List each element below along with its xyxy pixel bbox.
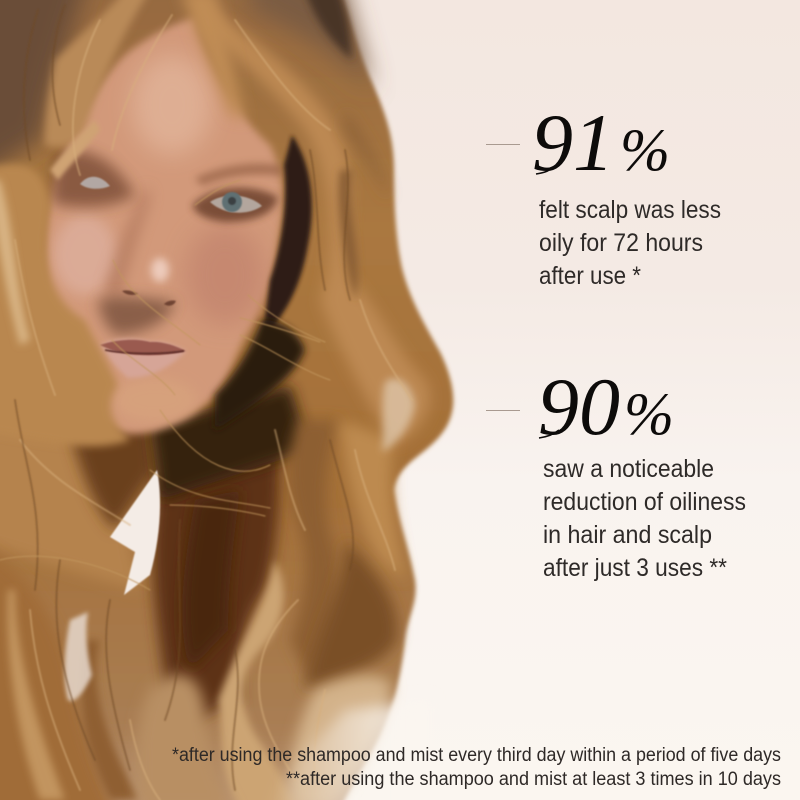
footnotes: **after using the shampoo and mist at least 3 times in 10 days <box>286 769 781 790</box>
description: oily for 72 hours <box>539 229 703 257</box>
dark shadow beside face <box>215 135 312 430</box>
pale lower right wave <box>289 676 392 800</box>
left eye shadow <box>52 151 135 207</box>
dash <box>486 410 520 411</box>
bottom fade into background <box>265 700 430 800</box>
big number: % <box>624 381 674 447</box>
swash on nine <box>539 430 559 438</box>
portrait photo: woman with wavy hair <box>0 0 453 800</box>
left cheek light <box>53 215 117 295</box>
footnotes: *after using the shampoo and mist every third day within a period of five days <box>172 745 781 766</box>
big number: 90 <box>538 361 620 452</box>
swash on nine <box>536 167 553 174</box>
big number: % <box>620 117 670 183</box>
white shirt collar <box>64 470 160 701</box>
stat block: 91% <box>486 97 721 290</box>
description: after use * <box>539 262 641 290</box>
right cheek <box>185 225 265 325</box>
description: in hair and scalp <box>543 521 712 549</box>
light golden wave <box>218 560 300 800</box>
nose highlight <box>151 258 169 282</box>
dash <box>486 144 520 145</box>
front hair over face <box>0 0 245 446</box>
shadow under nose <box>98 296 175 335</box>
forehead highlight <box>132 55 212 155</box>
description: after just 3 uses ** <box>543 554 727 582</box>
nose bridge shadow <box>105 185 150 300</box>
hair strands <box>0 5 412 800</box>
description: saw a noticeable <box>543 455 714 483</box>
upper right glint <box>382 379 415 452</box>
footnotes <box>172 745 781 790</box>
description: felt scalp was less <box>539 196 721 224</box>
hair silhouette <box>0 0 453 800</box>
stat block: 90% <box>486 361 746 582</box>
chin <box>113 378 197 422</box>
right brow <box>195 163 282 186</box>
lower middle blond <box>137 675 235 800</box>
hair tone masses <box>0 0 430 800</box>
lips <box>100 339 186 378</box>
dark right wave <box>305 540 398 690</box>
nostrils <box>122 290 176 306</box>
right eye iris <box>210 196 262 213</box>
description: reduction of oiliness <box>543 488 746 516</box>
big number: 91 <box>532 97 614 188</box>
dark center fall <box>153 450 280 745</box>
right eye socket <box>192 188 278 222</box>
face <box>45 18 283 434</box>
left eye <box>80 177 110 189</box>
